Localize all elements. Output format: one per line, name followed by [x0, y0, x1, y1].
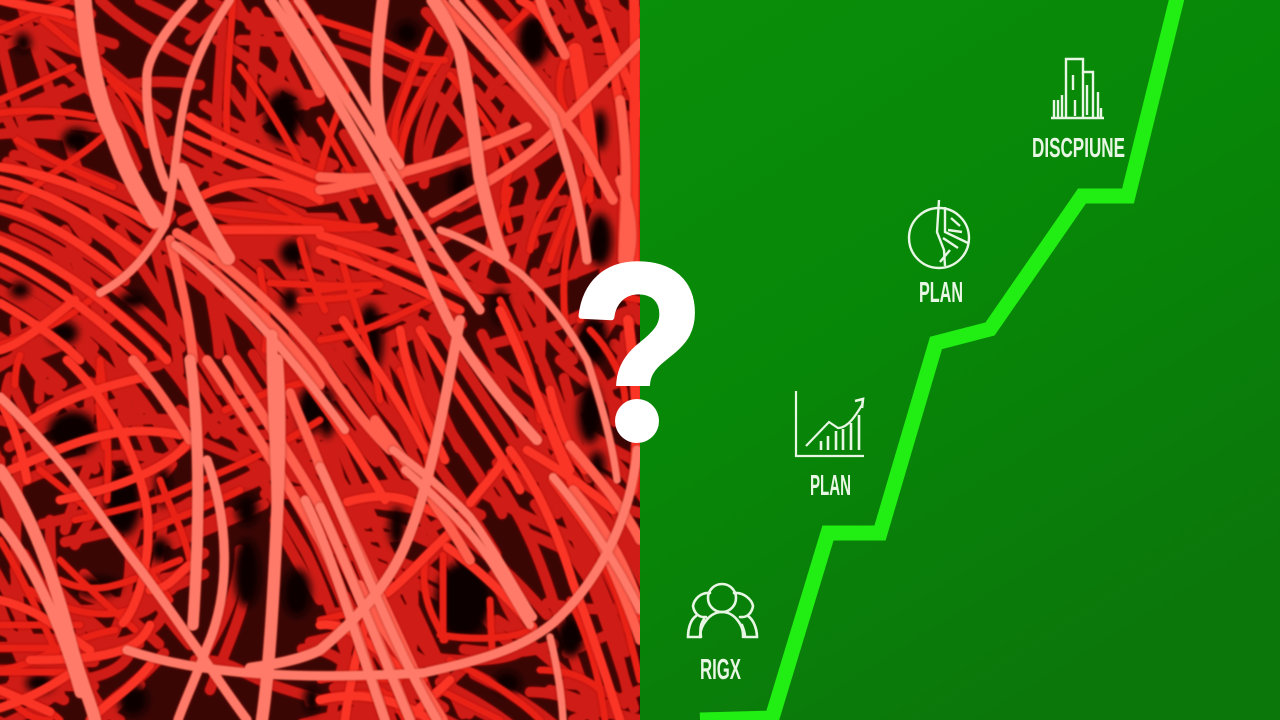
- icon: pie chart: [909, 200, 969, 268]
- label: PLAN (pie): PLAN: [919, 277, 963, 309]
- rising bright green line: [700, 0, 1178, 720]
- question mark: ?: [571, 214, 705, 489]
- label: RIGX: RIGX: [700, 654, 741, 686]
- icon: people group: [688, 584, 757, 637]
- icon: buildings: [1051, 59, 1104, 118]
- label: PLAN (chart): PLAN: [810, 470, 851, 502]
- question mark: [578, 261, 695, 443]
- icon: rising bar chart: [796, 391, 864, 456]
- panel: tangled red strands: [0, 0, 666, 720]
- label: DISCIPLINE: DISCPIUNE: [1032, 132, 1125, 163]
- panel: green path background: [640, 0, 1280, 720]
